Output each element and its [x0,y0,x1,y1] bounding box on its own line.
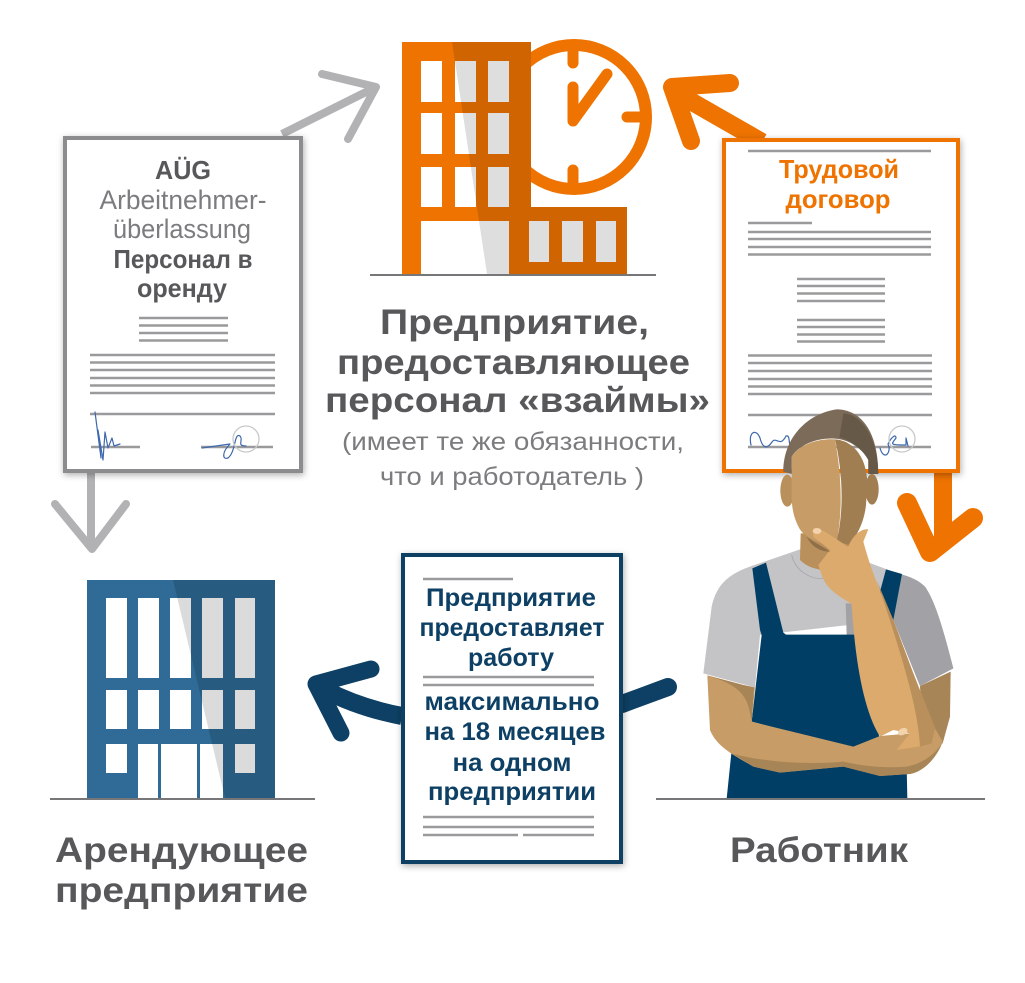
arrow: orange arrow to lending company [672,83,762,142]
contract title [779,154,899,214]
heading: lending company [325,303,710,420]
note text: предоставляет [420,614,604,642]
arrow: grey arrow to lending company [282,74,376,139]
note text: на 18 месяцев [424,718,606,746]
heading: lending company: предоставляющее [337,343,690,382]
shirt [703,549,953,687]
panel: AÜG document [65,138,301,471]
note text: работу [468,644,554,672]
document title [100,155,266,303]
contract title: договор [786,184,890,214]
heading: renting company: Арендующее [55,831,308,870]
ground line: worker [656,798,985,800]
signatures and stamp [95,412,259,460]
note text [420,584,606,806]
overalls bottom [727,750,907,799]
icon: blue building [87,580,275,798]
arrow: dark blue arrow to renting company [316,669,668,733]
text: lending company note: что и работодатель ) [380,463,644,491]
icon: worker [703,409,953,799]
note text: на одном [452,749,572,777]
text: lending company note: (имеет те же обязанности, [342,428,684,456]
document title: оренду [137,273,228,303]
fingernails [813,528,821,534]
heading: worker: Работник [730,831,909,870]
contract lines [748,151,932,447]
ground line: lending company [370,274,656,276]
text: lending company note [342,428,684,491]
arrow: grey arrow down to renting company [55,472,126,549]
arrow: orange arrow down to worker [907,472,973,552]
signatures and stamp [750,426,915,455]
ears [780,475,794,507]
document title: Персонал в [114,244,252,274]
hair [783,409,878,474]
crossed arm [707,675,943,776]
heading: renting company [55,831,308,910]
note text: максимально [424,688,600,716]
note text: предприятии [428,778,596,806]
raised forearm and hand [813,528,935,750]
icon: orange building [402,42,627,274]
icon: clock [502,45,646,189]
panel: 18 months note [403,555,621,862]
neck [800,533,857,570]
face [792,439,841,547]
heading: renting company: предприятие [55,871,308,910]
document title: Arbeitnehmer- [100,185,266,215]
ground line: renting company [50,798,315,800]
document lines [90,318,275,447]
note text: Предприятие [426,584,596,612]
bib [752,563,880,748]
note lines [423,579,594,835]
upper arm right [920,672,951,747]
document title: AÜG [155,155,211,185]
document title: überlassung [113,214,251,244]
heading: lending company: персонал «взаймы» [325,381,710,420]
strap right [880,569,902,620]
panel: employment contract [724,140,958,471]
heading: lending company: Предприятие, [380,303,649,342]
contract title: Трудовой [779,154,899,184]
collar [792,555,823,579]
